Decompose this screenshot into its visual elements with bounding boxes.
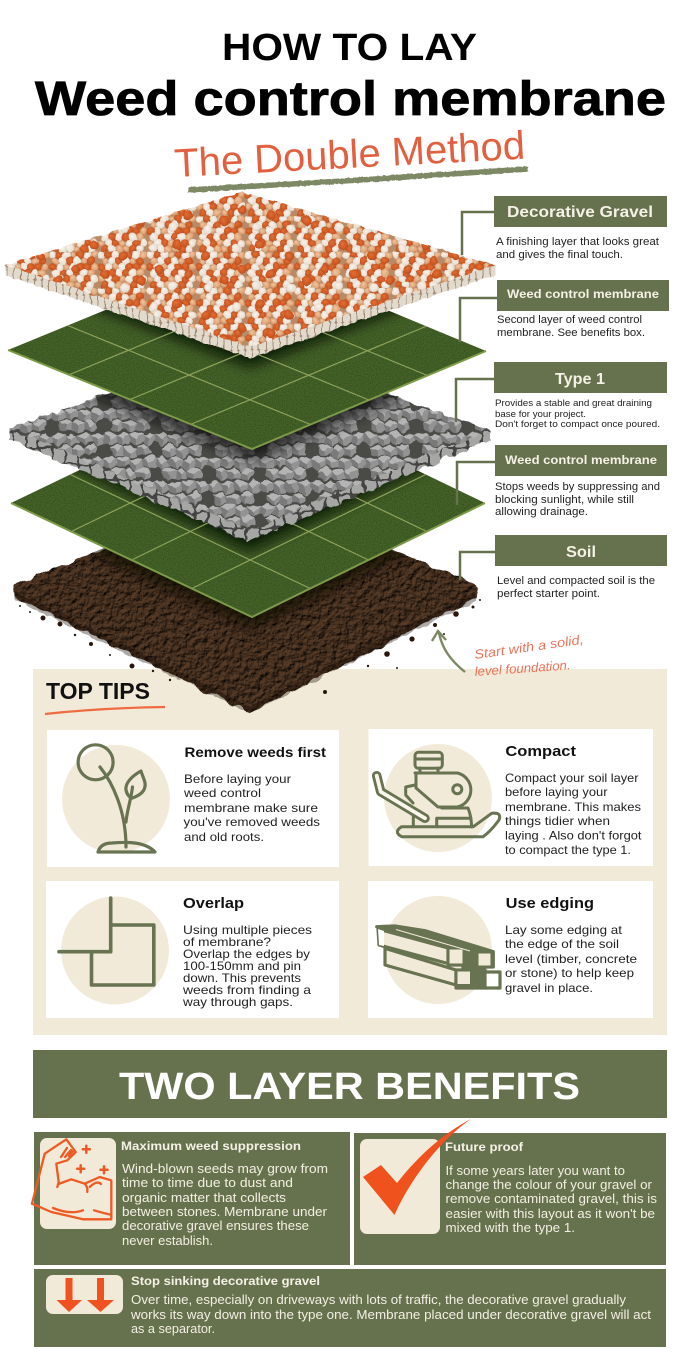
icon: down arrows xyxy=(56,1278,114,1312)
label: decorative gravel: A finishing layer that looks great xyxy=(496,236,659,248)
tip card: remove weeds first: Remove weeds first xyxy=(184,745,327,760)
annotation: foundation note: Start with a solid, xyxy=(473,632,584,662)
label: lower weed control membrane: Stops weeds by suppressing and xyxy=(495,481,660,493)
benefit panel: maximum weed suppression: decorative gravel ensures these xyxy=(122,1219,309,1233)
label: upper weed control membrane xyxy=(460,280,669,342)
label: lower weed control membrane: blocking sunlight, while still xyxy=(495,494,634,506)
tip card: use edging: Use edging xyxy=(506,895,594,912)
label: upper weed control membrane: Weed control membrane xyxy=(507,289,659,301)
banner: two layer benefits: TWO LAYER BENEFITS xyxy=(119,1066,580,1108)
layer: soil xyxy=(13,548,481,714)
tip card: use edging: or stone) to help keep xyxy=(505,966,634,980)
tip card: compact: before laying your xyxy=(505,785,608,799)
benefit panel: maximum weed suppression: Maximum weed suppression xyxy=(121,1139,301,1153)
tip card: overlap: of membrane? xyxy=(183,935,271,949)
tip card: overlap: Overlap xyxy=(183,895,244,912)
tip card: overlap: way through gaps. xyxy=(182,995,293,1009)
tip card: use edging: the edge of the soil xyxy=(505,937,619,951)
tip card: overlap: down. This prevents xyxy=(183,971,301,985)
tip card: compact: membrane. This makes xyxy=(505,800,641,814)
annotation: foundation note: level foundation. xyxy=(474,657,571,679)
icon: plate compactor xyxy=(397,752,500,837)
subtitle: the double method: The Double Method xyxy=(173,124,526,186)
benefit panel: future proof: If some years later you want to xyxy=(446,1164,625,1178)
icon: compactor handle xyxy=(377,776,425,818)
benefit panel: maximum weed suppression: never establish. xyxy=(122,1234,213,1248)
tip card: compact: Compact your soil layer xyxy=(505,771,638,785)
title: how to lay: HOW TO LAY xyxy=(222,27,477,69)
tip card: remove weeds first: Before laying your xyxy=(184,772,291,786)
layer: upper weed control membrane xyxy=(8,310,486,450)
banner: two layer benefits xyxy=(33,1050,667,1118)
soil crumbs xyxy=(19,596,481,694)
label: upper weed control membrane: Second layer of weed control xyxy=(497,314,642,326)
label: decorative gravel xyxy=(462,196,667,261)
tip card: compact xyxy=(368,729,653,866)
label: upper weed control membrane: membrane. See benefits box. xyxy=(497,327,645,339)
label: lower weed control membrane: allowing drainage. xyxy=(495,506,588,518)
benefit panel: future proof: remove contaminated gravel, this is xyxy=(446,1192,657,1206)
tip card: compact: things tidier when xyxy=(505,814,610,828)
benefit panel: future proof: Future proof xyxy=(445,1140,524,1154)
label: soil: Level and compacted soil is the xyxy=(497,575,655,587)
tip card: overlap: Using multiple pieces xyxy=(183,923,312,937)
tip card: use edging: level (timber, concrete xyxy=(505,952,637,966)
tip card: compact: to compact the type 1. xyxy=(505,843,631,857)
layer: type 1 stone xyxy=(9,392,491,542)
benefit panel: maximum weed suppression xyxy=(32,1132,350,1265)
heading: top tips: TOP TIPS xyxy=(46,678,150,704)
tip card: use edging: gravel in place. xyxy=(505,981,593,995)
tip card: compact: laying . Also don't forgot xyxy=(505,828,642,842)
label: soil: Soil xyxy=(566,544,596,561)
layer: lower weed control membrane xyxy=(10,470,486,618)
arrow: to soil foundation xyxy=(432,631,465,672)
icon: edging timbers xyxy=(377,926,500,988)
label: type 1: Type 1 xyxy=(555,371,605,388)
benefit panel: maximum weed suppression: Wind-blown seeds may grow from xyxy=(122,1162,328,1176)
benefit panel: stop sinking decorative gravel: Over time, especially on driveways with lots of traffic, the decorative gravel gradually xyxy=(131,1293,627,1307)
tip card: remove weeds first: membrane make sure xyxy=(184,801,318,815)
tip card: remove weeds first: and old roots. xyxy=(184,830,264,844)
benefit panel: future proof: change the colour of your gravel or xyxy=(446,1178,652,1192)
label: lower weed control membrane: Weed control membrane xyxy=(505,455,657,467)
layer: decorative gravel xyxy=(5,192,495,358)
tip card: use edging: Lay some edging at xyxy=(505,923,623,937)
tip card: overlap: weeds from finding a xyxy=(182,983,311,997)
heading: top tips xyxy=(45,678,165,714)
label: type 1: base for your project. xyxy=(495,409,586,420)
label: soil xyxy=(460,535,667,600)
label: type 1: Provides a stable and great draining xyxy=(495,398,652,409)
subtitle underline xyxy=(188,169,528,190)
icon: flexed muscle xyxy=(32,1139,111,1219)
benefit panel: maximum weed suppression: between stones. Membrane under xyxy=(122,1205,327,1219)
icon: plant xyxy=(78,745,155,852)
tip card: overlap xyxy=(46,881,339,1018)
benefit panel: future proof: easier with this layout as it won't be xyxy=(446,1207,655,1221)
label: decorative gravel: Decorative Gravel xyxy=(507,204,653,221)
tip card: overlap: Overlap the edges by xyxy=(183,947,310,961)
benefit panel: maximum weed suppression: time to time due to dust and xyxy=(122,1176,293,1190)
benefit panel: maximum weed suppression: organic matter that collects xyxy=(122,1191,286,1205)
benefit panel: stop sinking decorative gravel: Stop sinking decorative gravel xyxy=(131,1274,320,1288)
benefit panel: stop sinking decorative gravel xyxy=(34,1269,666,1347)
tip card: remove weeds first: you've removed weeds xyxy=(184,815,320,829)
tip card: overlap: 100-150mm and pin xyxy=(183,959,301,973)
label: type 1: Don't forget to compact once poured. xyxy=(495,419,660,430)
label: soil: perfect starter point. xyxy=(497,588,600,600)
panel: top tips background xyxy=(33,669,667,1035)
annotation: foundation note xyxy=(473,632,584,679)
tip card: remove weeds first: weed control xyxy=(183,786,261,800)
tip card: remove weeds first xyxy=(47,730,339,867)
icon: overlapping squares xyxy=(59,898,154,985)
tip card: use edging xyxy=(368,881,653,1018)
benefit panel: stop sinking decorative gravel: as a separator. xyxy=(131,1322,215,1336)
label: type 1 xyxy=(456,362,667,430)
title: weed control membrane: Weed control membrane xyxy=(35,73,666,126)
benefit panel: future proof: mixed with the type 1. xyxy=(446,1221,575,1235)
icon: orange check mark xyxy=(363,1119,471,1215)
label: decorative gravel: and gives the final touch. xyxy=(496,249,623,261)
label: lower weed control membrane xyxy=(457,445,667,518)
benefit panel: stop sinking decorative gravel: works its way down into the type one. Membrane placed under decorative gravel will act xyxy=(130,1308,652,1322)
benefit panel: future proof xyxy=(354,1133,666,1265)
tip card: compact: Compact xyxy=(505,743,576,760)
